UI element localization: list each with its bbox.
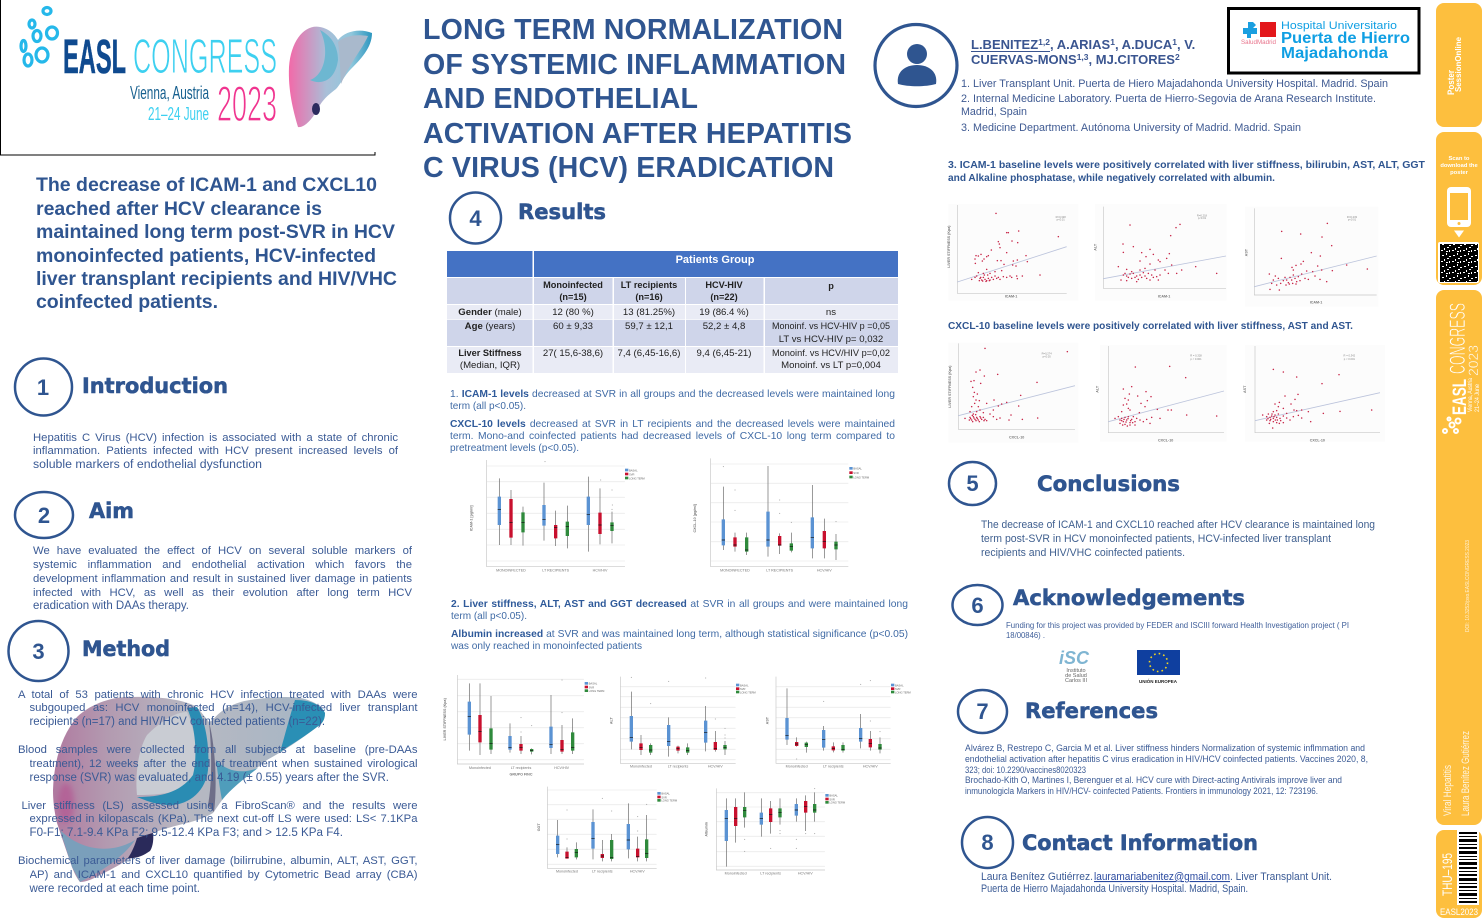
authors: L.BENITEZ [971,37,1038,52]
scatter: CXCL-10 vs ALT [1096,345,1227,442]
aim text: systemic inflammation and endothelial activation which favors the [33,559,412,571]
authors: , A.ARIAS [1050,37,1111,52]
logo wordmark CONGRESS: CONGRESS [133,30,277,84]
patients table: 52,2 ± 4,8 [703,321,745,332]
box plot: albumin: Albumin [705,822,709,837]
scatter: CXCL-10 vs ALT: ALT [1096,385,1100,393]
box plot: ALT: LONG TERM [740,690,756,694]
watermark liver behind method text [53,697,325,882]
contact text: Laura Benítez Gutiérrez. [981,871,1093,883]
results text: CXCL-10: term. Mono-and coinfected patients had decreased levels of CXCL-10 long term compared to [450,431,895,442]
box plot: albumin: LONG TERM [829,801,845,805]
authors [971,37,1195,67]
box plot: ALT: HCV/HIV [708,765,723,769]
authors: 1 [1172,37,1177,47]
aim text: eradication with DAAs therapy. [33,600,189,612]
box plot: ICAM-1: LONG TERM [629,476,645,480]
box plot: ICAM-1: HCV/HIV [593,568,608,572]
box plot: AST: BASAL [895,683,904,687]
affiliations: 1. Liver Transplant Unit. Puerta de Hiero Majadahonda University Hospital. Madrid. Spain [961,78,1388,90]
title: OF SYSTEMIC INFLAMMATION [423,49,846,81]
logo: Instituto de Salud Carlos III [1059,648,1090,684]
icon: phone [1447,187,1471,227]
method text: Liver stiffness (LS) assessed using a FibroScan® and the results were [22,800,418,812]
section 8 number: 8 [981,830,994,855]
results text: CXCL-10: pretreatment levels (p<0.05). [450,443,579,454]
box plot: AST: SVR [895,687,901,691]
logo: Instituto de Salud Carlos III: de Salud [1065,673,1087,679]
introduction text [33,429,398,471]
QR code [1438,242,1479,283]
authors: 1,3 [1077,52,1089,62]
introduction text: Hepatitis C Virus (HCV) infection is associated with a state of chronic [33,432,398,444]
section 3 number: 3 [32,639,45,664]
references text: endothelial activation after hepatitis C virus eradication in HIV/HCV coinfected patients. Vaccines 2020, 8, [965,754,1368,764]
scatter: CXCL-10 vs ALT: p < 0.001 [1190,357,1202,361]
results text: albumin: Albumin increased at SVR and was maintained long term, although statistical significance (p<0.05) [451,629,908,640]
patients table: 27( 15,6-38,6) [543,348,603,359]
box plot: CXCL-10: SVR [853,471,859,475]
references text: inmunologicla Markers in HIV/HCV- coinfected Patients. Frontiers in immunology 2021, 12: 723196. [965,786,1318,796]
sidebar panel: poster number and barcode [1436,830,1482,918]
references text [965,743,1368,796]
scatter: ICAM-1 vs liver stiffness: R=0,328 [1056,215,1066,219]
author avatar [875,24,957,106]
main summary statement: monoinfected patients, HCV-infected [36,245,376,267]
patients table: 12 (80 %) [552,307,594,318]
scatter: ICAM-1 vs liver stiffness [947,204,1078,301]
patients table: HCV-HIV [705,280,744,290]
results text: ICAM-1: term (all p<0.05). [450,401,526,412]
title: C VIRUS (HCV) ERADICATION [423,152,834,184]
title [423,14,852,184]
contact text: lauramariabenitez@gmail.com [1094,871,1230,883]
main summary statement: coinfected patients. [36,291,218,313]
scatter: CXCL-10 vs AST: CXCL-10 [1310,438,1325,442]
patients table: 19 (86.4 %) [699,307,749,318]
box plot: ICAM-1: LT RECIPIENTS [542,568,570,572]
authors: 1 [1110,37,1115,47]
scatter: ICAM-1 vs ALT [1094,204,1227,301]
main summary statement [36,174,397,313]
sidebar panel: congress details: Laura Benítez Gutiérrez [1460,731,1472,816]
results text: ICAM-1 [450,385,895,412]
method text: expressed in kilopascals (KPa). The next cut-off LS were used: LS< 7.1KPa [30,813,418,825]
aim text [33,542,412,612]
congress logo box [0,0,375,155]
patients table: Liver Stiffness [458,348,522,358]
patients table: LT recipients [621,280,677,290]
authors: , MJ.CITORES [1089,52,1175,67]
acknowledgements text [1006,620,1349,640]
title: AND ENDOTHELIAL [423,83,698,115]
section 2 heading: Aim [89,499,134,523]
barcode [1457,830,1479,905]
logo: European Union flag: UNIÓN EUROPEA [1139,677,1178,684]
box plot: liver stiffness: LT recipients [511,766,531,770]
patients table: (n=22) [710,292,738,302]
scatter: CXCL-10 vs liver stiffness: R=0,274 [1042,352,1052,356]
section 8 heading: Contact Information [1022,831,1258,855]
method text: subgouped as: HCV monoinfected (n=14), HCV-infected liver transplant [30,702,418,714]
scatter: CXCL-10 vs ALT: R = 0,328 [1190,354,1202,358]
conclusions text: term post-SVR in HCV monoinfected patients, HCV-infected liver transplant [981,533,1331,545]
box plot: ICAM-1: BASAL [629,468,638,472]
sidebar panel: poster number and barcode: THU–195 [1439,853,1455,896]
introduction text: inflammation. Patients infected with HCV present increased levels of [33,445,398,457]
aim text: infected with HCV, as well as their evolution after long term HCV [33,587,412,599]
section 3 heading: Method [82,637,170,661]
icon: hexagon cells [21,8,58,66]
hospital logo [1228,8,1419,73]
patients table: 60 ± 9,33 [553,321,593,332]
logo: Instituto de Salud Carlos III: Instituto [1066,668,1086,674]
aim text: We have evaluated the effect of HCV on several soluble markers of [33,545,412,557]
scatter: CXCL-10 vs liver stiffness: LIVER STIFFNESS (Kpa) [948,365,952,408]
box plot: CXCL-10: LONG TERM [853,475,869,479]
results text: liver stiffness [451,595,908,622]
patients table: Patients Group [676,254,755,266]
results text: liver stiffness: 2. Liver stiffness, ALT, AST and GGT decreased at SVR in all groups and were maintained long [451,599,908,610]
section 4 number [450,192,501,244]
patients table: (n=15) [559,292,587,302]
scatter: ICAM-1 vs AST: p<0.01 [1348,218,1357,222]
sidebar panel: congress details: 2023 [1465,345,1481,376]
hospital logo: Puerta de Hierro [1281,30,1410,47]
conclusions text [981,519,1375,559]
patients table: Monoinf. vs HCV/HIV p=0,02 [772,348,890,359]
section 7 number: 7 [976,699,989,724]
patients table: 13 (81.25%) [623,307,675,318]
hospital logo: Majadahonda [1281,45,1388,62]
scatter: ICAM-1 vs liver stiffness: ICAM-1 [1005,294,1017,298]
scatter: ICAM-1 vs ALT: p<0.01 [1198,216,1207,220]
icon: arrow down [1454,230,1464,238]
section 1 heading: Introduction [82,374,228,398]
section 4 number: 4 [469,206,482,231]
box plot: ICAM-1 [470,460,645,572]
sidebar panel: poster session online: Poster [1446,70,1456,95]
title: ACTIVATION AFTER HEPATITIS [423,118,852,150]
box plot: ALT: Monoinfected [630,765,652,769]
logo: Instituto de Salud Carlos III: iSC [1059,648,1090,668]
patients table: (n=16) [635,292,663,302]
box plot: liver stiffness: SVR [589,685,594,689]
scatter: ICAM-1 vs ALT: R=0,218 [1197,213,1208,217]
box plot: albumin: LT recipients [760,871,781,875]
section 2 number [15,492,73,538]
patients table: 59,7 ± 12,1 [625,321,673,332]
aim text: development inflammation and result in sustained liver damage in patients [33,573,412,585]
scatter: CXCL-10 vs ALT: CXCL-10 [1158,438,1173,442]
method text: response (SVR) was evaluated, and 4.19 (± 0.55) years after the SVR. [30,772,389,784]
patients table: 9,4 (6,45-21) [697,348,751,359]
authors: 2 [1175,52,1180,62]
method text: F0-F1; 7.1-9.4 KPa F2; 9.5-12.4 KPa F3; and > 12.5 KPa F4. [30,827,343,839]
section 2 number: 2 [38,503,50,528]
result 3 text: ICAM-1 correlation: 3. ICAM-1 baseline levels were positively correlated with liver stiffness, bilirubin, AST, ALT, GGT [948,160,1426,171]
sidebar panel: scan to download: Scan to [1449,156,1470,162]
scatter: ICAM-1 vs AST: AST [1244,248,1248,256]
box plot: GGT [537,787,677,874]
patients table: Age (years) [465,321,515,332]
box plot: AST: AST [765,716,769,724]
scatter: ICAM-1 vs AST [1244,207,1378,307]
main summary statement: liver transplant recipients and HIV/VHC [36,268,397,290]
hospital logo: Hospital Universitario [1281,20,1397,32]
sidebar panel: poster number and barcode: EASL2023 [1440,907,1478,917]
sidebar panel: congress details [1436,290,1482,825]
section 6 number [952,585,1002,625]
box plot: ICAM-1: MONOINFECTED [496,568,526,572]
method text: A total of 53 patients with chronic HCV infection treated with DAAs were [18,689,418,701]
affiliations: 3. Medicine Department. Autónoma University of Madrid. Madrid. Spain [961,122,1301,134]
result 3 text: ICAM-1 correlation [948,160,1426,184]
scatter: CXCL-10 vs liver stiffness: p<0.05 [1043,355,1051,359]
box plot: liver stiffness [443,675,604,777]
box plot: GGT: HCV/HIV [630,870,645,874]
authors: , A.DUCA [1115,37,1173,52]
method text: AP) and ICAM-1 and CXCL10 quantified by Cytometric Bead array (CBA) [30,869,418,881]
section 6 number: 6 [971,593,984,618]
patients table: Monoinfected [543,280,603,290]
icon: liver [289,27,372,127]
section 1 number [15,358,72,416]
section 6 heading: Acknowledgements [1013,586,1245,610]
patients table: LT vs HCV-HIV p= 0,032 [779,334,883,345]
box plot: albumin: HCV/HIV [798,871,813,875]
box plot: liver stiffness: LIVER STIFFNESS (Kpa) [443,697,447,740]
patients table: Gender (male) [458,307,522,318]
results text: liver stiffness: term (all p<0.05). [451,611,527,622]
patients table: p [828,281,834,291]
authors: 1,2 [1038,37,1050,47]
sidebar panel: scan to download [1436,132,1482,285]
acknowledgements text: 18/00846) . [1006,630,1045,640]
box plot: AST: HCV/HIV [863,765,878,769]
box plot: AST: LONG TERM [895,690,911,694]
main summary statement: reached after HCV clearance is [36,198,322,220]
box plot: ALT: LT recipients [668,765,688,769]
scatter: ICAM-1 vs ALT: ICAM-1 [1158,294,1170,298]
logo: European Union flag [1137,650,1180,684]
affiliations: 2. Internal Medicine Laboratory. Puerta de Hierro-Segovia de Arana Research Institute. [961,93,1376,105]
patients table: Monoinf. vs LT p=0,004 [781,360,881,371]
scatter: CXCL-10 vs AST: p < 0.001 [1344,357,1355,361]
sidebar panel: poster session online: SessionOnline [1454,36,1463,92]
method text: Biochemical parameters of liver damage (bilirrubine, albumin, ALT, AST, GGT, [18,855,418,867]
patients table: (Median, IQR) [460,360,520,371]
box plot: AST: Monoinfected [786,765,808,769]
sidebar panel: scan to download: download the [1440,163,1478,169]
conclusions text: The decrease of ICAM-1 and CXCL10 reached after HCV clearance is maintained long [981,519,1375,531]
main summary statement: maintained long term post-SVR in HCV [36,221,395,243]
section 1 number: 1 [37,375,49,400]
method text: recipients (n=17) and HIV/HCV coinfected patients (n=22). [30,716,325,728]
logo place: Vienna, Austria [130,83,210,103]
box plot: ALT: ALT [610,716,614,724]
conclusions text: recipients and HIV/VHC coinfected patients. [981,547,1185,559]
result 3 text: CXCL-10 correlation: CXCL-10 baseline levels were positively correlated with liver stiffness, AST and AST. [948,321,1353,332]
affiliations: Madrid, Spain [961,106,1027,118]
logo year: 2023 [217,76,277,132]
sidebar panel: congress details: EASL [1450,379,1471,415]
scatter: ICAM-1 vs liver stiffness: LIVER STIFFNESS (Kpa) [947,225,951,268]
box plot: GGT: LT recipients [592,870,613,874]
patients table: Monoinf. vs HCV-HIV p =0,05 [772,321,890,332]
box plot: liver stiffness: HCV/HIV [554,766,570,770]
scatter: ICAM-1 vs AST: R=0,233 [1347,215,1358,219]
box plot: GGT: SVR [661,795,667,799]
result 3 text: ICAM-1 correlation: and Alkaline phosphatase, while negatively correlated with albumin. [948,173,1275,184]
scatter: CXCL-10 vs AST [1243,345,1385,442]
sidebar panel: congress details: Vienna, Austria [1468,377,1474,412]
contact text: Puerta de Hierro Majadahonda University Hospital. Madrid, Spain. [981,883,1248,895]
box plot: CXCL-10: LT RECIPIENTS [766,568,794,572]
sidebar panel: congress details: DOI: 10.3252/pso.EASLCONGRESS.2023 [1465,540,1471,632]
box plot: liver stiffness: LONG TERM [589,689,604,693]
patients table: 7,4 (6,45-16,6) [618,348,680,359]
scatter: CXCL-10 vs AST: R = 0,342 [1344,354,1356,358]
results text: ICAM-1: 1. ICAM-1 levels decreased at SVR in all groups and the decreased levels were maintained long [450,389,895,400]
box plot: GGT: BASAL [661,792,670,796]
references text: 323; doi: 10.2290/vaccines8020323 [965,765,1086,775]
patients table: ns [826,307,836,318]
box plot: albumin: Monoinfected [725,871,747,875]
results text: albumin: was only reached in monoinfected patients [450,641,642,652]
section 8 number [962,817,1013,868]
section 5 number [949,462,996,505]
section 4 heading: Results [518,200,606,224]
box plot: AST [765,677,911,769]
results text: CXCL-10 [450,415,895,454]
box plot: GGT: GGT [537,823,541,831]
scatter: ICAM-1 vs liver stiffness: p<0.01 [1057,218,1065,222]
scatter: CXCL-10 vs liver stiffness: CXCL-10 [1009,435,1024,439]
sidebar panel: congress details: Viral Hepatitis [1442,765,1454,816]
method text: Blood samples were collected from all subjects at baseline (pre-DAAs [18,744,418,756]
box plot: CXCL-10: HCV/HIV [817,568,832,572]
logo: Instituto de Salud Carlos III: Carlos III [1065,678,1087,684]
authors: CUERVAS-MONS [971,52,1077,67]
box plot: GGT: Monoinfected [556,870,578,874]
congress logo box: EASL [63,31,126,84]
authors: , V. [1177,37,1195,52]
method text: were recorded at each time point. [29,883,200,895]
box plot: liver stiffness: GRUPO FINC [510,773,533,777]
patients table [447,251,898,373]
sidebar panel: poster session online [1436,3,1482,127]
scatter: CXCL-10 vs liver stiffness [948,343,1078,443]
box plot: albumin: SVR [829,797,835,801]
box plot: AST: LT recipients [823,765,844,769]
box plot: albumin [705,788,845,875]
references text: Alvárez B, Restrepo C, Garcia M et al. Liver stiffness hinders Normalization of systemic inflmmation and [965,743,1365,753]
box plot: CXCL-10: BASAL [853,467,862,471]
box plot: CXCL-10 [693,458,869,572]
contact text: . Liver Transplant Unit. [1230,871,1332,883]
results text: albumin [450,625,908,652]
affiliations [961,78,1388,134]
box plot: ICAM-1: SVR [629,472,635,476]
box plot: ALT: SVR [740,687,746,691]
box plot: CXCL-10: MONOINFECTED [720,568,750,572]
box plot: ICAM-1: ICAM-1 [pg/ml] [470,505,474,531]
title: LONG TERM NORMALIZATION [423,14,843,46]
section 7 heading: References [1025,699,1158,723]
icon: person [898,44,936,86]
box plot: ALT: BASAL [740,683,749,687]
box plot: CXCL-10: CXCL-10 [pg/ml] [693,503,697,533]
sidebar panel: scan to download: poster [1450,170,1469,176]
references text: Brochado-Kith O, Martines I, Berenguer et al. HCV cure with Direct-acting Antivirals improve liver and [965,775,1342,785]
scatter: ICAM-1 vs AST: ICAM-1 [1310,301,1322,305]
icon: Salud Madrid mark [1241,22,1276,46]
sidebar panel: congress details: CONGRESS [1445,303,1470,374]
section 5 number: 5 [966,471,979,496]
method text: treatment), 12 weeks after the end of treatment when sustained virological [30,758,418,770]
box plot: liver stiffness: BASAL [589,682,598,686]
section 5 heading: Conclusions [1037,472,1180,496]
box plot: ALT [610,677,756,769]
box plot: liver stiffness: Monoinfected [469,766,491,770]
acknowledgements text: Funding for this project was provided by FEDER and ISCIII forward Health Investigation project ( PI [1006,620,1349,630]
icon: Salud Madrid mark: SaludMadrid [1241,39,1276,46]
scatter: ICAM-1 vs ALT: ALT [1094,243,1098,251]
contact text [981,871,1332,895]
section 7 number [958,690,1007,733]
scatter: CXCL-10 vs AST: AST [1243,385,1247,393]
method text [18,686,418,895]
logo dates: 21–24 June [148,104,209,124]
introduction text: soluble markers of endothelial dysfunction [33,459,262,471]
box plot: albumin: BASAL [829,794,838,798]
sidebar panel: congress details: 21–24 June [1475,383,1481,412]
section 3 number [8,621,68,681]
box plot: GGT: LONG TERM [661,799,677,803]
main summary statement: The decrease of ICAM-1 and CXCL10 [36,174,377,196]
